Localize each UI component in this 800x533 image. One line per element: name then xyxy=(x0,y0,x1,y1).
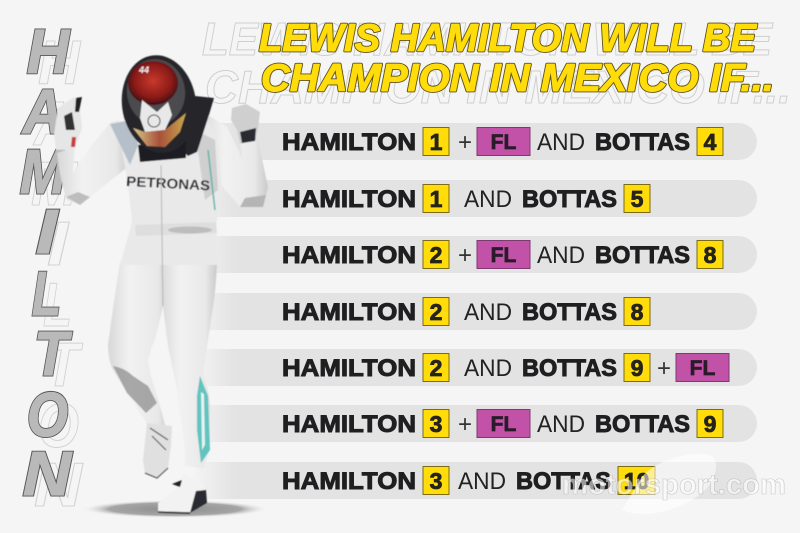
watermark: motorsport.com: motorsport.com xyxy=(562,469,786,501)
right shoe xyxy=(158,473,207,513)
row 4: Hamilton 2 and Bottas 8: 2 xyxy=(430,299,442,325)
row 2: Hamilton 1 and Bottas 5: AND xyxy=(464,186,512,213)
vertical name: HAMILTON: L xyxy=(32,260,61,329)
helmet silver trim xyxy=(123,55,189,129)
row 7: Hamilton 3 and Bottas 10: 10 xyxy=(624,468,649,494)
row 7: Hamilton 3 and Bottas 10: HAMILTON xyxy=(282,468,416,495)
vertical name: ghost outline letters: O xyxy=(38,392,79,461)
vertical name: HAMILTON: I xyxy=(36,198,59,267)
title: CHAMPION IN MEXICO IF... xyxy=(261,57,774,100)
vertical name: HAMILTON: O xyxy=(27,381,68,450)
row 1: Hamilton 1 + FL and Bottas 4: HAMILTON xyxy=(282,129,416,156)
row 4: Hamilton 2 and Bottas 8: BOTTAS xyxy=(522,299,617,326)
title ghost outline xyxy=(202,13,791,113)
torso xyxy=(112,114,222,265)
vertical name: HAMILTON: H xyxy=(27,18,70,87)
row 4: Hamilton 2 and Bottas 8: 8 xyxy=(631,299,644,325)
row 6: Hamilton 3 + FL and Bottas 9 xyxy=(190,405,757,442)
row 3: Hamilton 2 + FL and Bottas 8 xyxy=(190,236,757,273)
row 5: Hamilton 2 and Bottas 9 + FL: BOTTAS xyxy=(522,355,617,382)
row 1: Hamilton 1 + FL and Bottas 4: + xyxy=(458,129,472,156)
left shoe xyxy=(143,423,172,478)
vertical name: HAMILTON: M xyxy=(20,138,67,207)
row 2: Hamilton 1 and Bottas 5: BOTTAS xyxy=(522,186,617,213)
row 3: Hamilton 2 + FL and Bottas 8: 8 xyxy=(704,242,717,268)
row 3: Hamilton 2 + FL and Bottas 8: 2 xyxy=(430,242,442,268)
left arm sleeve xyxy=(57,120,130,205)
row 3: Hamilton 2 + FL and Bottas 8: HAMILTON xyxy=(282,242,416,269)
ground shadow xyxy=(81,500,269,518)
row 2: Hamilton 1 and Bottas 5: 5 xyxy=(631,186,644,212)
vertical name: HAMILTON: H xyxy=(27,18,70,87)
left shoulder shading xyxy=(110,120,138,165)
row 1: Hamilton 1 + FL and Bottas 4: 1 xyxy=(430,129,443,155)
row 7: Hamilton 3 and Bottas 10: AND xyxy=(458,468,506,495)
row 1: Hamilton 1 + FL and Bottas 4: BOTTAS xyxy=(595,129,690,156)
vertical name: ghost outline letters: T xyxy=(45,331,84,400)
title ghost outline: CHAMPION IN MEXICO IF... xyxy=(205,61,791,113)
title ghost outline: LEWIS HAMILTON WILL BE xyxy=(202,13,773,65)
row 5: Hamilton 2 and Bottas 9 + FL: AND xyxy=(464,355,512,382)
torso shading xyxy=(195,130,218,200)
row 3: Hamilton 2 + FL and Bottas 8: + xyxy=(458,242,472,269)
row 6: Hamilton 3 + FL and Bottas 9: 9 xyxy=(704,411,716,437)
row 4: Hamilton 2 and Bottas 8: AND xyxy=(464,299,512,326)
watermark swoosh xyxy=(622,454,716,514)
vertical name: ghost outline letters: H xyxy=(38,29,81,98)
belt xyxy=(135,222,217,236)
row 5: Hamilton 2 and Bottas 9 + FL: + xyxy=(657,355,671,382)
vertical name: ghost outline letters: A xyxy=(32,90,74,159)
row 7: Hamilton 3 and Bottas 10 xyxy=(190,462,757,499)
row 5: Hamilton 2 and Bottas 9 + FL: FL xyxy=(690,357,715,380)
row 6: Hamilton 3 + FL and Bottas 9: 3 xyxy=(430,411,442,437)
Petronas logo: PETRONAS xyxy=(126,173,211,193)
vertical name: HAMILTON: A xyxy=(21,78,63,147)
vertical name: HAMILTON xyxy=(20,18,73,509)
row 2: Hamilton 1 and Bottas 5: HAMILTON xyxy=(282,186,416,213)
helmet red dome xyxy=(128,61,178,105)
row 5: Hamilton 2 and Bottas 9 + FL: HAMILTON xyxy=(282,355,416,382)
vertical name: HAMILTON: N xyxy=(23,440,72,509)
title xyxy=(259,17,774,100)
row 7: Hamilton 3 and Bottas 10: 3 xyxy=(430,468,442,494)
vertical name: ghost outline letters: I xyxy=(47,210,70,279)
vertical name: HAMILTON: N xyxy=(23,440,72,509)
vertical name: HAMILTON: I xyxy=(36,198,59,267)
helmet number: 44 xyxy=(138,65,149,75)
right leg xyxy=(160,262,217,468)
helmet white panel xyxy=(140,100,172,132)
vertical name: HAMILTON: L xyxy=(32,260,61,329)
row 3: Hamilton 2 + FL and Bottas 8: FL xyxy=(491,244,516,267)
neck collar xyxy=(182,96,214,156)
driver figure xyxy=(54,50,268,513)
centre zip xyxy=(161,165,163,306)
row 4: Hamilton 2 and Bottas 8: HAMILTON xyxy=(282,299,416,326)
row 1: Hamilton 1 + FL and Bottas 4: FL xyxy=(491,131,516,154)
teal stripes xyxy=(197,376,210,463)
row 7: Hamilton 3 and Bottas 10: BOTTAS xyxy=(516,468,611,495)
visor xyxy=(133,113,186,147)
row 6: Hamilton 3 + FL and Bottas 9: AND xyxy=(537,411,585,438)
vertical name: HAMILTON: M xyxy=(20,138,67,207)
row 6: Hamilton 3 + FL and Bottas 9: HAMILTON xyxy=(282,411,416,438)
vertical name: HAMILTON: T xyxy=(34,320,73,389)
vertical name: HAMILTON: T xyxy=(34,320,73,389)
title: LEWIS HAMILTON WILL BE xyxy=(259,17,757,60)
row 3: Hamilton 2 + FL and Bottas 8: BOTTAS xyxy=(595,242,690,269)
row 2: Hamilton 1 and Bottas 5 xyxy=(190,180,757,217)
row 3: Hamilton 2 + FL and Bottas 8: AND xyxy=(537,242,585,269)
right glove xyxy=(231,104,260,144)
vertical name: HAMILTON: A xyxy=(21,78,63,147)
row 6: Hamilton 3 + FL and Bottas 9: BOTTAS xyxy=(595,411,690,438)
row 6: Hamilton 3 + FL and Bottas 9: + xyxy=(458,411,472,438)
left leg xyxy=(108,262,170,425)
row 6: Hamilton 3 + FL and Bottas 9: FL xyxy=(491,413,516,436)
left glove xyxy=(54,97,82,150)
right arm sleeve xyxy=(200,113,268,207)
title: LEWIS HAMILTON WILL BE xyxy=(259,17,757,60)
row 5: Hamilton 2 and Bottas 9 + FL xyxy=(190,349,757,386)
row 1: Hamilton 1 + FL and Bottas 4: 4 xyxy=(704,129,717,155)
title: CHAMPION IN MEXICO IF... xyxy=(261,57,774,100)
row 2: Hamilton 1 and Bottas 5: 1 xyxy=(430,186,443,212)
vertical name: HAMILTON: O xyxy=(27,381,68,450)
vertical name: ghost outline letters xyxy=(31,29,84,520)
row 5: Hamilton 2 and Bottas 9 + FL: 2 xyxy=(430,355,442,381)
vertical name: ghost outline letters: N xyxy=(34,451,83,520)
vertical name: ghost outline letters: M xyxy=(31,150,78,219)
row 4: Hamilton 2 and Bottas 8 xyxy=(190,293,757,330)
row 1: Hamilton 1 + FL and Bottas 4: AND xyxy=(537,129,585,156)
vertical name: ghost outline letters: L xyxy=(43,271,72,340)
helmet xyxy=(116,50,202,158)
left leg shadow xyxy=(113,366,157,413)
row 1: Hamilton 1 + FL and Bottas 4 xyxy=(190,123,757,160)
row 5: Hamilton 2 and Bottas 9 + FL: 9 xyxy=(631,355,643,381)
